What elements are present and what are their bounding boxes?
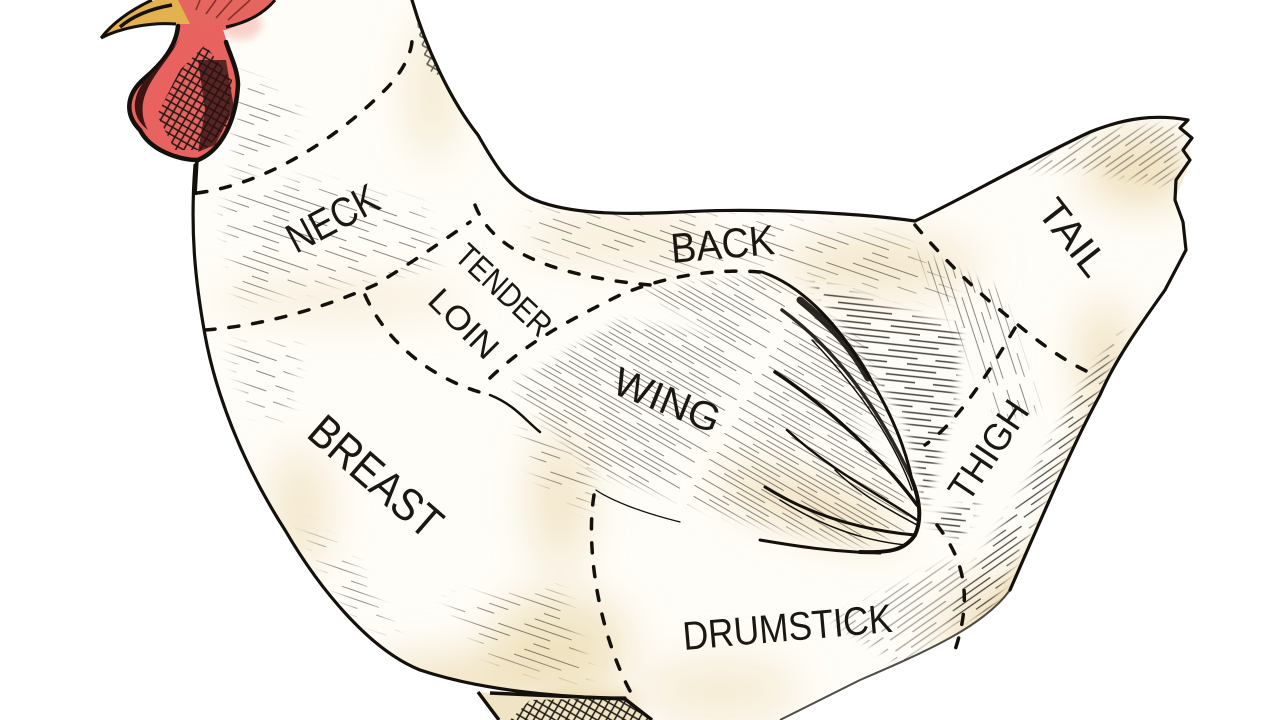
label: DRUMSTICK: DRUMSTICK [681,597,894,659]
label: BREAST: BREAST [298,404,453,549]
label: THIGH: THIGH [941,393,1038,509]
comb [176,0,275,30]
pink glow around comb [218,8,262,40]
chicken body fill and shading [198,0,1191,720]
label: LOIN: LOIN [421,281,507,366]
feet / lower leg stub [478,692,655,720]
label: WING: WING [607,360,727,442]
label: BACK: BACK [669,216,776,272]
label: NECK: NECK [278,174,387,262]
neck stem under wattle [195,160,197,195]
hatching [214,22,1188,684]
wattle [129,24,238,160]
wing feathers [490,272,919,553]
body outline [193,0,1192,698]
label: TAIL: TAIL [1029,190,1117,285]
label: TENDER: TENDER [448,236,560,344]
dashed cut lines [197,40,1095,700]
beak [101,0,190,38]
lower right outline [780,590,1010,720]
